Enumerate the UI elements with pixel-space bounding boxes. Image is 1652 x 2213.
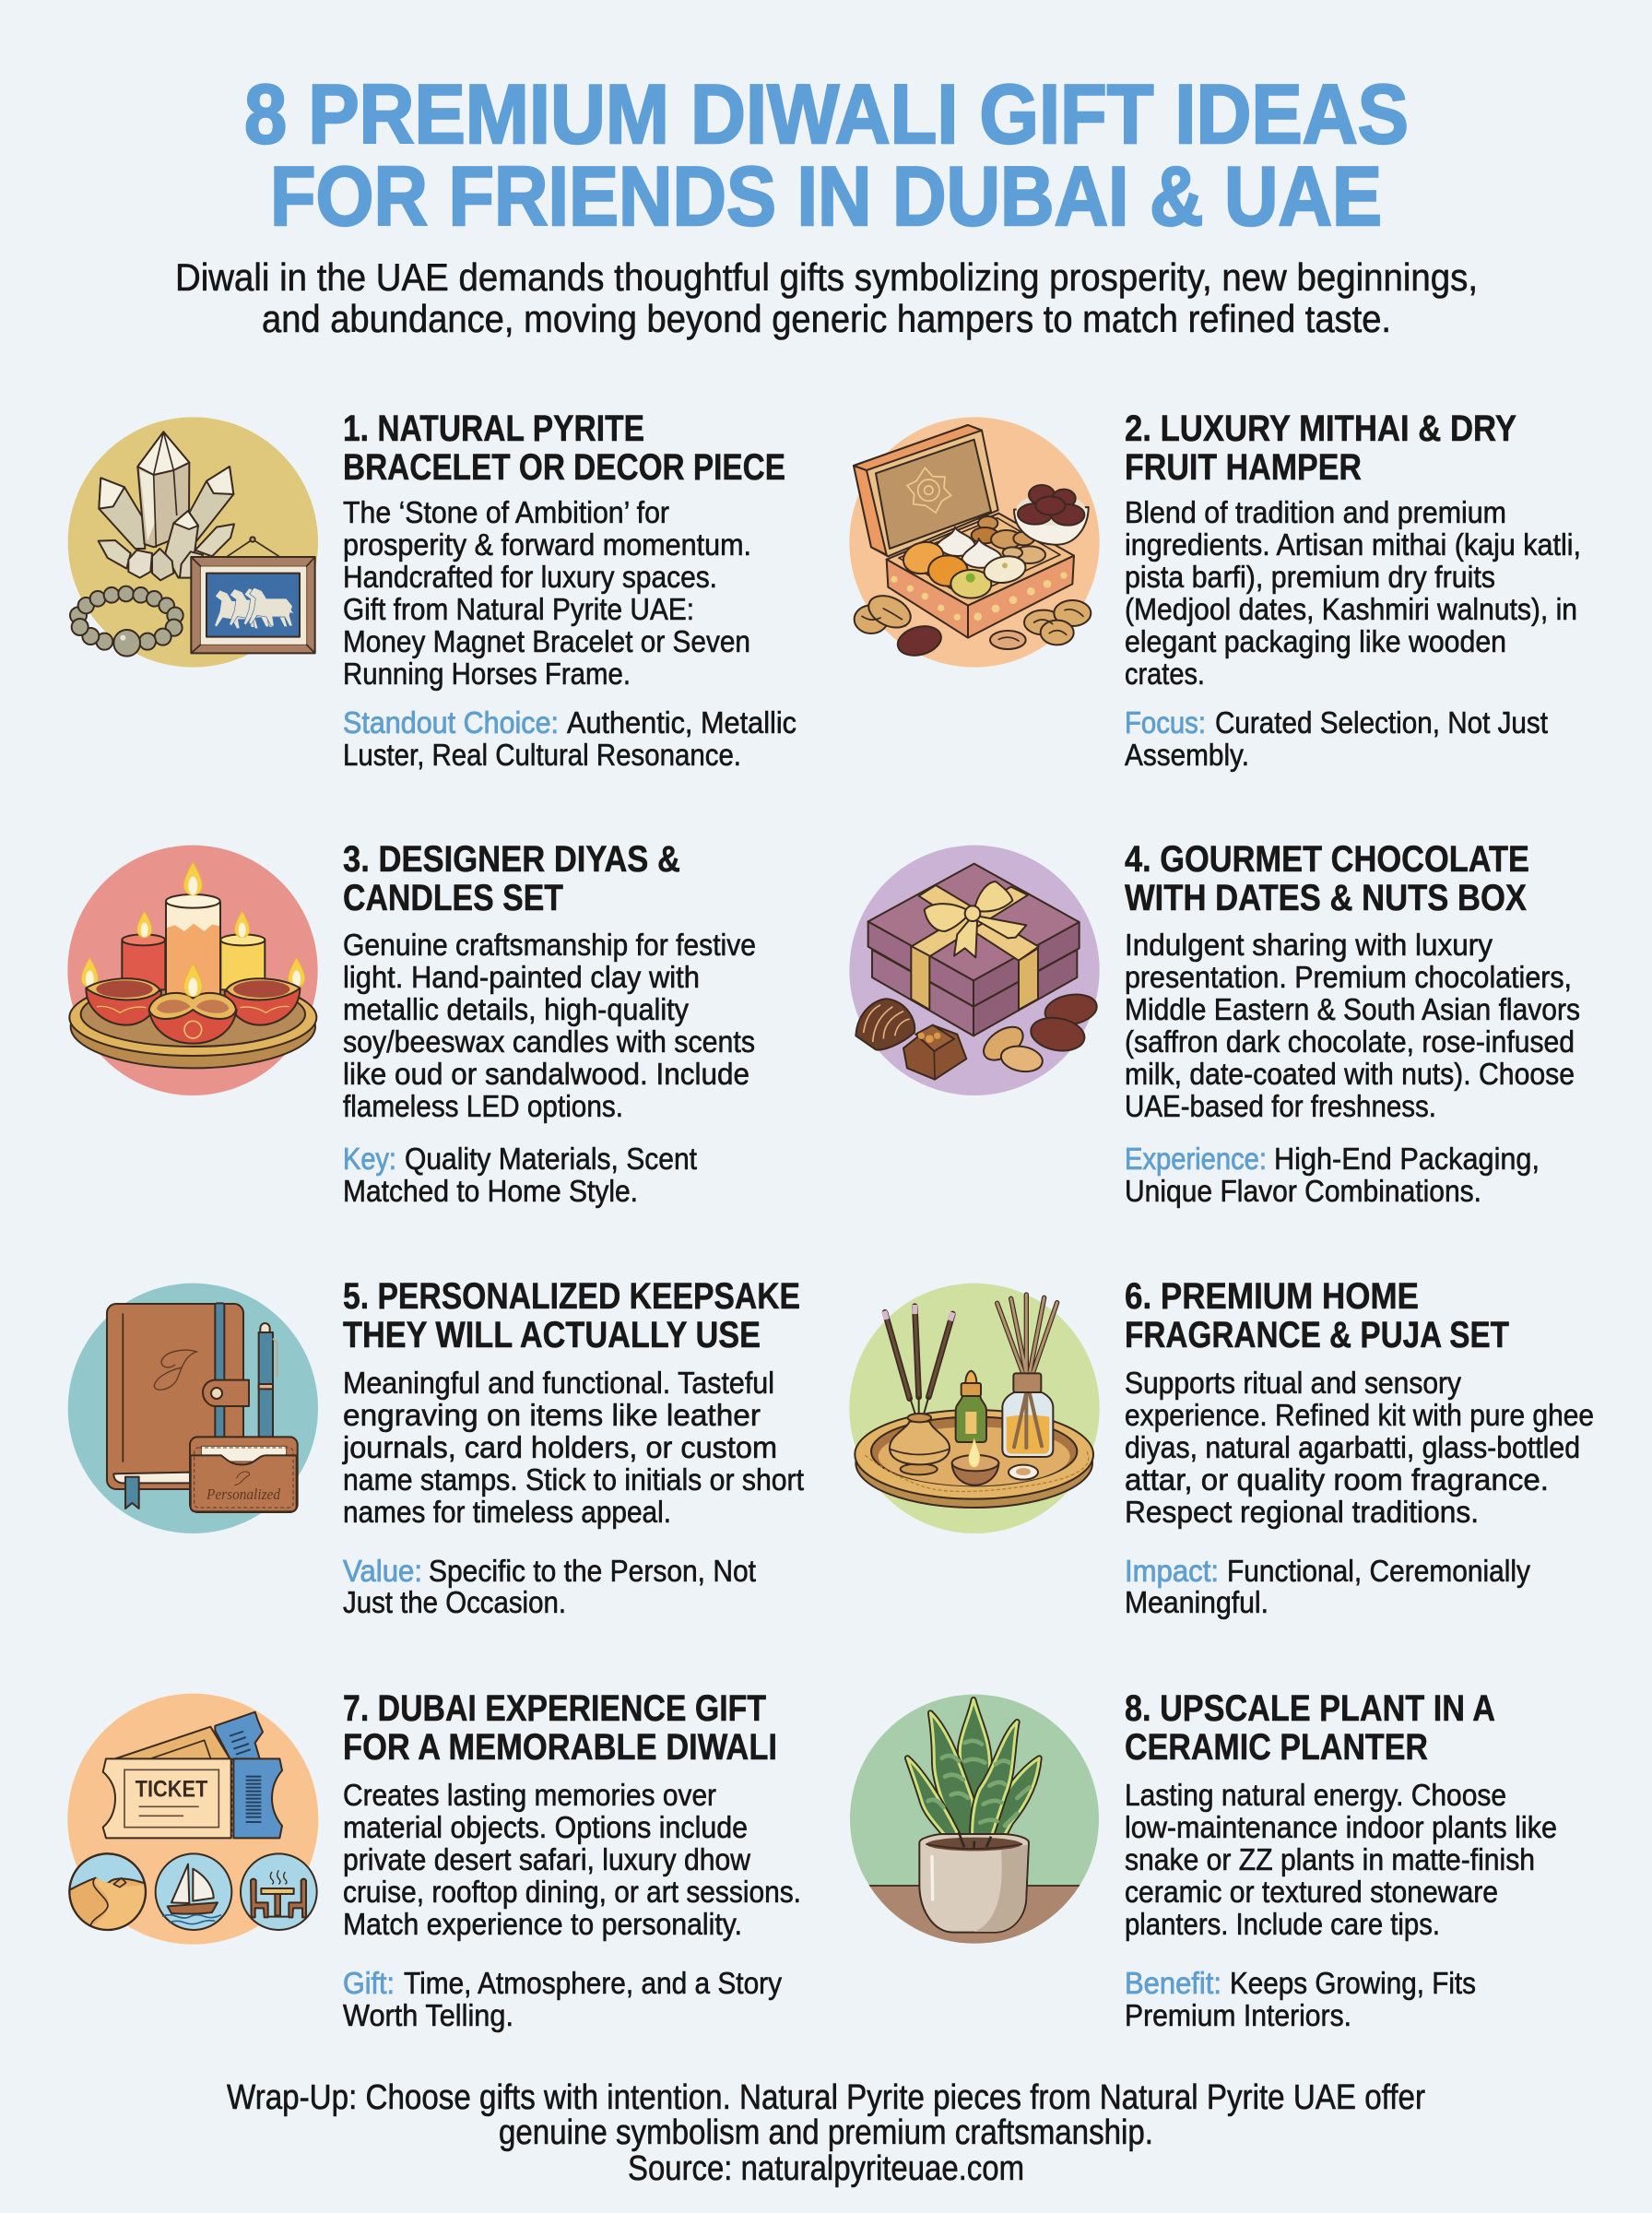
callout: Focus:: [1125, 705, 1206, 740]
body text: Gift from Natural Pyrite UAE:: [343, 592, 694, 626]
body text: [343, 1778, 801, 1941]
icon: puja tray with incense, attar and diffuser: [849, 1284, 1100, 1533]
heading: [343, 839, 680, 918]
callout: Assembly.: [1125, 738, 1249, 772]
title: [244, 68, 1409, 243]
callout: [1125, 1142, 1540, 1208]
panel: gift 6 home fragrance: [849, 1276, 1594, 1619]
callout: Keeps Growing, Fits: [1230, 1966, 1476, 2000]
heading: [1125, 839, 1529, 918]
callout: Meaningful.: [1125, 1585, 1268, 1619]
footer wrap-up: genuine symbolism and premium craftsmanship.: [499, 2113, 1153, 2152]
body text: journals, card holders, or custom: [342, 1430, 777, 1464]
body text: cruise, rooftop dining, or art sessions.: [343, 1875, 801, 1909]
body text: (Medjool dates, Kashmiri walnuts), in: [1125, 592, 1577, 626]
heading: THEY WILL ACTUALLY USE: [343, 1315, 761, 1355]
body text: light. Hand-painted clay with: [343, 960, 700, 994]
callout: Curated Selection, Not Just: [1215, 705, 1548, 740]
body text: Respect regional traditions.: [1125, 1495, 1479, 1529]
panel: gift 2 mithai hamper: [849, 408, 1581, 772]
body text: ceramic or textured stoneware: [1125, 1875, 1498, 1909]
panel: gift 8 plant in ceramic planter: [848, 1688, 1557, 2032]
heading: 2. LUXURY MITHAI & DRY: [1125, 408, 1516, 449]
callout: Specific to the Person, Not: [429, 1554, 756, 1588]
body text: planters. Include care tips.: [1125, 1907, 1440, 1941]
body text: low-maintenance indoor plants like: [1125, 1810, 1557, 1844]
body text: crates.: [1125, 657, 1205, 691]
heading: FRUIT HAMPER: [1125, 447, 1362, 488]
body text: prosperity & forward momentum.: [343, 527, 751, 562]
callout: Matched to Home Style.: [343, 1174, 638, 1208]
icon: leather journal, pen and card holder: [68, 1284, 318, 1533]
body text: snake or ZZ plants in matte-finish: [1125, 1842, 1535, 1876]
body text: engraving on items like leather: [343, 1398, 761, 1432]
callout: Worth Telling.: [343, 1998, 513, 2032]
callout: Impact:: [1125, 1554, 1219, 1588]
icon: leather journal, pen and card holder: Personalized: [206, 1485, 281, 1503]
body text: [1125, 1366, 1594, 1529]
body text: attar, or quality room fragrance.: [1125, 1462, 1549, 1497]
body text: UAE-based for freshness.: [1125, 1089, 1436, 1123]
body text: diyas, natural agarbatti, glass-bottled: [1125, 1430, 1580, 1464]
body text: Indulgent sharing with luxury: [1125, 928, 1493, 962]
callout: Gift:: [343, 1966, 395, 2000]
title: 8 PREMIUM DIWALI GIFT IDEAS: [244, 68, 1409, 161]
body text: Match experience to personality.: [343, 1907, 742, 1941]
body text: elegant packaging like wooden: [1125, 624, 1506, 658]
panel: gift 1 natural pyrite: [68, 408, 796, 772]
panel: gift 5 personalized keepsake: [68, 1276, 804, 1619]
callout: Premium Interiors.: [1125, 1998, 1351, 2032]
heading: 1. NATURAL PYRITE: [343, 408, 644, 449]
subtitle: [175, 255, 1478, 340]
body text: ingredients. Artisan mithai (kaju katli,: [1125, 527, 1581, 562]
callout: Luster, Real Cultural Resonance.: [343, 738, 741, 772]
callout: Key:: [343, 1142, 396, 1176]
callout: Time, Atmosphere, and a Story: [404, 1966, 782, 2000]
heading: 8. UPSCALE PLANT IN A: [1125, 1688, 1495, 1729]
icon: open sweet box with dates and nuts: [849, 417, 1100, 668]
heading: [1125, 408, 1516, 488]
body text: like oud or sandalwood. Include: [343, 1057, 749, 1091]
callout: [343, 1142, 697, 1208]
icon: gift box with chocolates and dates: [849, 845, 1100, 1095]
subtitle: and abundance, moving beyond generic hampers to match refined taste.: [262, 297, 1391, 340]
callout: [343, 705, 796, 772]
body text: Creates lasting memories over: [343, 1778, 716, 1812]
heading: 7. DUBAI EXPERIENCE GIFT: [343, 1688, 766, 1729]
heading: [343, 408, 785, 488]
heading: FRAGRANCE & PUJA SET: [1125, 1315, 1509, 1355]
heading: [343, 1688, 777, 1768]
callout: Quality Materials, Scent: [405, 1142, 697, 1176]
body text: [1125, 928, 1580, 1123]
subtitle: Diwali in the UAE demands thoughtful gifts symbolizing prosperity, new beginnings,: [175, 255, 1478, 299]
footer wrap-up: Wrap-Up: Choose gifts with intention. Natural Pyrite pieces from Natural Pyrite UAE offer: [227, 2078, 1425, 2117]
body text: [343, 928, 756, 1123]
callout: [343, 1966, 782, 2032]
heading: 5. PERSONALIZED KEEPSAKE: [343, 1276, 800, 1317]
body text: Meaningful and functional. Tasteful: [343, 1366, 774, 1400]
body text: presentation. Premium chocolatiers,: [1125, 960, 1572, 994]
footer wrap-up: Source: naturalpyriteuae.com: [628, 2149, 1024, 2188]
body text: Genuine craftsmanship for festive: [343, 928, 756, 962]
body text: Money Magnet Bracelet or Seven: [343, 624, 750, 658]
body text: Middle Eastern & South Asian flavors: [1125, 992, 1580, 1026]
callout: Benefit:: [1125, 1966, 1221, 2000]
icon: candles and diyas on tray: [67, 845, 318, 1095]
heading: 6. PREMIUM HOME: [1125, 1276, 1419, 1317]
body text: soy/beeswax candles with scents: [343, 1024, 755, 1059]
callout: Standout Choice:: [343, 705, 559, 740]
body text: Supports ritual and sensory: [1125, 1366, 1461, 1400]
body text: [342, 1366, 804, 1529]
callout: Experience:: [1125, 1142, 1267, 1176]
callout: Functional, Ceremonially: [1227, 1554, 1530, 1588]
callout: Just the Occasion.: [343, 1585, 566, 1619]
callout: [1125, 1966, 1476, 2032]
body text: [1125, 495, 1581, 691]
icon: snake plant in ceramic pot: [850, 1695, 1099, 1944]
body text: Lasting natural energy. Choose: [1125, 1778, 1506, 1812]
icon: tickets with desert, dhow and dining badges: [67, 1693, 319, 1945]
heading: BRACELET OR DECOR PIECE: [343, 447, 785, 488]
heading: FOR A MEMORABLE DIWALI: [343, 1727, 777, 1768]
callout: [343, 1554, 756, 1619]
body text: material objects. Options include: [343, 1810, 748, 1844]
heading: [343, 1276, 800, 1355]
heading: CERAMIC PLANTER: [1125, 1727, 1428, 1768]
body text: [343, 495, 751, 691]
body text: experience. Refined kit with pure ghee: [1125, 1398, 1594, 1432]
callout: Unique Flavor Combinations.: [1125, 1174, 1481, 1208]
body text: The ‘Stone of Ambition’ for: [343, 495, 669, 529]
body text: (saffron dark chocolate, rose-infused: [1125, 1024, 1575, 1059]
icon: pyrite crystals, bracelet and horses frame: [68, 417, 318, 668]
heading: CANDLES SET: [343, 878, 563, 918]
body text: [1125, 1778, 1557, 1941]
callout: [1125, 705, 1548, 772]
heading: 4. GOURMET CHOCOLATE: [1125, 839, 1529, 880]
heading: [1125, 1276, 1509, 1355]
footer wrap-up: [227, 2078, 1425, 2188]
body text: flameless LED options.: [343, 1089, 623, 1123]
callout: Authentic, Metallic: [567, 705, 796, 740]
body text: name stamps. Stick to initials or short: [343, 1462, 804, 1497]
icon: tickets with desert, dhow and dining badges: TICKET: [136, 1777, 208, 1803]
heading: WITH DATES & NUTS BOX: [1125, 878, 1527, 918]
body text: Running Horses Frame.: [343, 657, 631, 691]
body text: names for timeless appeal.: [343, 1495, 671, 1529]
heading: 3. DESIGNER DIYAS &: [343, 839, 680, 880]
body text: private desert safari, luxury dhow: [343, 1842, 750, 1876]
callout: [1125, 1554, 1530, 1619]
heading: [1125, 1688, 1495, 1768]
body text: Blend of tradition and premium: [1125, 495, 1506, 529]
body text: metallic details, high-quality: [343, 992, 689, 1026]
body text: milk, date-coated with nuts). Choose: [1125, 1057, 1575, 1091]
callout: High-End Packaging,: [1274, 1142, 1540, 1176]
body text: Handcrafted for luxury spaces.: [343, 560, 717, 594]
panel: gift 4 gourmet chocolate: [849, 839, 1580, 1208]
panel: gift 7 experience gift: [67, 1688, 801, 2032]
title: FOR FRIENDS IN DUBAI & UAE: [270, 150, 1382, 243]
callout: Value:: [343, 1554, 422, 1588]
panel: gift 3 diyas and candles: [67, 839, 756, 1208]
body text: pista barfi), premium dry fruits: [1125, 560, 1495, 594]
